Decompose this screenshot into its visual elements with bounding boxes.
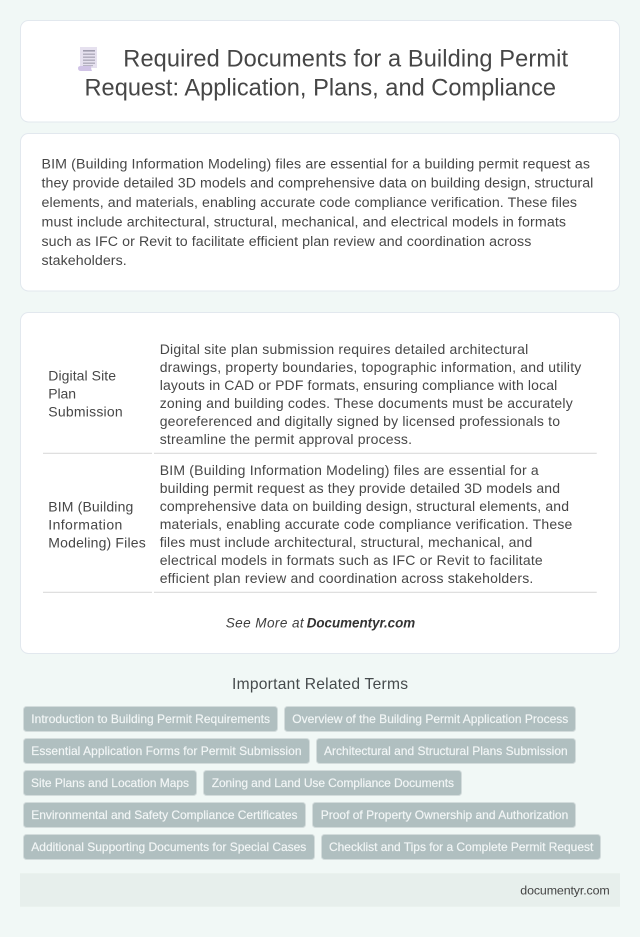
row label: Submission	[48, 404, 123, 420]
table row: digital site plan submission	[43, 341, 597, 454]
see more link	[226, 615, 415, 630]
summary text: elements, and materials, enabling accurate code compliance verification. These files	[42, 195, 577, 211]
tag	[24, 738, 310, 764]
row description: zoning and building codes. These documents must be accurately	[160, 395, 573, 411]
tag	[284, 706, 576, 732]
row label	[48, 498, 146, 550]
tag: Additional Supporting Documents for Special Cases	[31, 840, 306, 854]
row label: BIM (Building	[48, 498, 133, 514]
table row: BIM files	[43, 462, 597, 593]
row description: BIM (Building Information Modeling) files are essential for a	[160, 462, 539, 478]
row description: files must include architectural, structural, mechanical, and	[160, 534, 532, 550]
row description: georeferenced and digitally signed by licensed professionals to	[160, 413, 560, 429]
row label: Digital Site	[48, 368, 116, 384]
tag: Overview of the Building Permit Application Process	[292, 712, 568, 726]
title: Request: Application, Plans, and Compliance	[84, 76, 556, 102]
row description: layouts in CAD or PDF formats, ensuring compliance with local	[160, 377, 557, 393]
row description: streamline the permit approval process.	[160, 431, 412, 447]
tag: Architectural and Structural Plans Submission	[324, 744, 568, 758]
row label: Plan	[48, 386, 76, 402]
row description: drawings, property boundaries, topographic information, and utility	[160, 359, 581, 375]
panel: documents table	[20, 312, 620, 654]
footer: documentyr.com	[520, 883, 610, 897]
tag: Environmental and Safety Compliance Certificates	[31, 808, 298, 822]
row label: Modeling) Files	[48, 534, 146, 550]
tag	[316, 738, 576, 764]
heading: important related terms: Important Related Terms	[232, 676, 408, 693]
summary text: stakeholders.	[42, 253, 127, 269]
tag	[24, 802, 306, 828]
tag: Essential Application Forms for Permit Submission	[31, 744, 302, 758]
tag	[24, 834, 314, 860]
icon: document scroll	[78, 47, 97, 71]
row description	[160, 462, 573, 586]
row description: electrical models in formats such as IFC or Revit to facilitate	[160, 552, 543, 568]
title	[84, 46, 568, 102]
tag: Zoning and Land Use Compliance Documents	[212, 776, 454, 790]
row description: comprehensive data on building design, structural elements, and	[160, 498, 569, 514]
row description: efficient plan review and coordination across stakeholders.	[160, 570, 533, 586]
footer	[20, 873, 620, 907]
summary text: such as IFC or Revit to facilitate efficient plan review and coordination across	[42, 234, 531, 250]
tag: Site Plans and Location Maps	[31, 776, 189, 790]
see more link: See More at	[226, 615, 305, 630]
summary text: BIM (Building Information Modeling) files are essential for a building permit request as	[42, 156, 590, 172]
panel: title card	[20, 20, 620, 122]
tag	[24, 770, 196, 796]
tag: Checklist and Tips for a Complete Permit Request	[329, 840, 594, 854]
tag	[24, 706, 278, 732]
row label: Information	[48, 516, 122, 532]
tag	[322, 834, 600, 860]
summary text: they provide detailed 3D models and comprehensive data on building design, structural	[42, 175, 593, 191]
tag	[312, 802, 576, 828]
panel: summary paragraph	[20, 134, 620, 291]
title: Required Documents for a Building Permit	[123, 46, 568, 72]
row label	[48, 368, 123, 420]
row description: Digital site plan submission requires detailed architectural	[160, 341, 528, 357]
row description	[160, 341, 581, 447]
see more link: Documentyr.com	[307, 615, 415, 630]
tag: Proof of Property Ownership and Authorization	[321, 808, 568, 822]
row description: building permit request as they provide detailed 3D models and	[160, 480, 560, 496]
summary text: must include architectural, structural, mechanical, and electrical models in formats	[42, 214, 566, 230]
panel: related term tags	[24, 706, 600, 860]
summary text	[42, 156, 593, 269]
row description: materials, enabling accurate code compliance verification. These	[160, 516, 573, 532]
tag: Introduction to Building Permit Requirements	[31, 712, 270, 726]
tag	[204, 770, 462, 796]
